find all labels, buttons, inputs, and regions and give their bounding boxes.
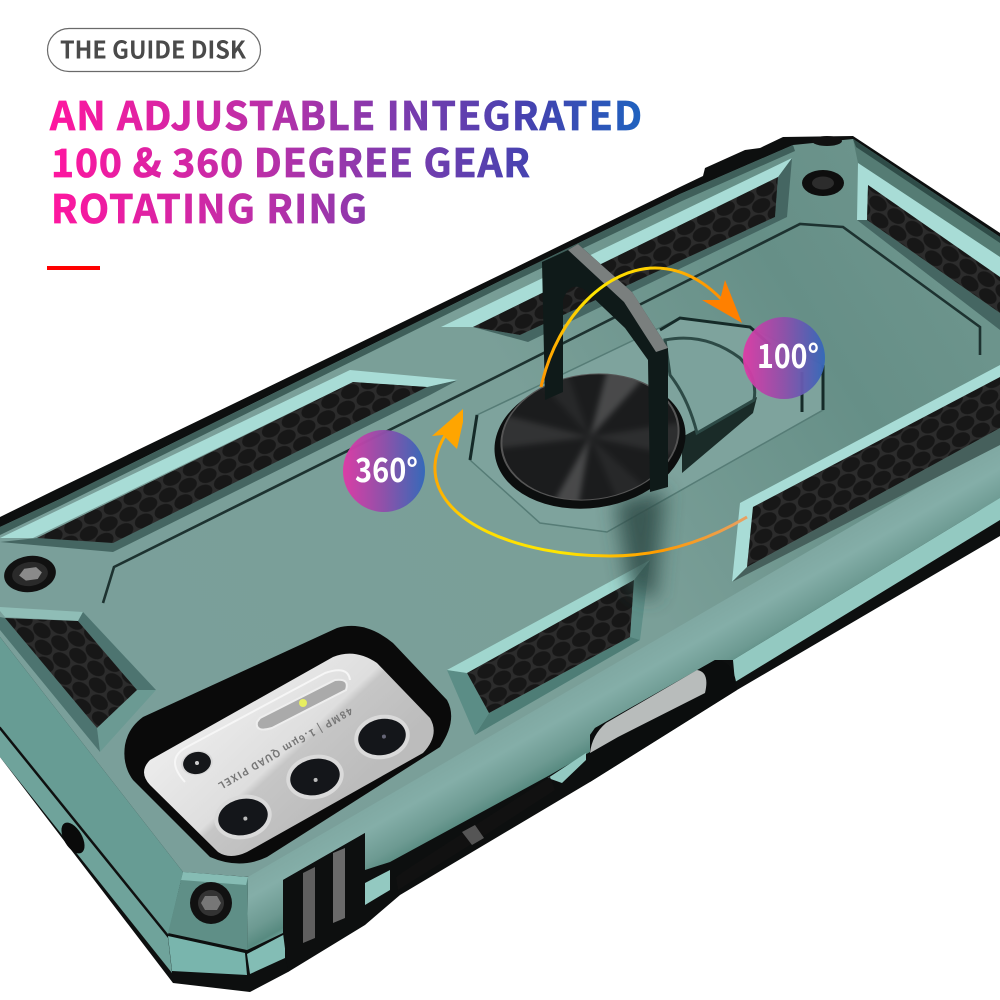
- badge: 360 degrees: [343, 430, 425, 512]
- light band after side button: [733, 498, 1000, 682]
- badge: 100 degrees: 100°: [757, 330, 819, 378]
- lower side buttons: [396, 777, 555, 890]
- inner panel outline: [103, 224, 980, 603]
- ring plate: [470, 318, 823, 532]
- grip strip: lower centre: [447, 560, 650, 735]
- lens panel outline: [175, 670, 350, 782]
- camera lens centre: [282, 749, 348, 805]
- camera lens left: [210, 789, 276, 845]
- camera island: [144, 654, 434, 856]
- folding ring arch: [542, 244, 668, 492]
- corner facets: [168, 872, 248, 950]
- title: AN ADJUSTABLE INTEGRATED: [49, 86, 642, 142]
- light band beside vent: [365, 870, 390, 905]
- camera recess: [124, 626, 451, 864]
- side button recess with silver button: [590, 660, 737, 782]
- ring shadow on case: [615, 490, 665, 600]
- red accent line: [47, 266, 100, 270]
- heading badge: the guide disk: THE GUIDE DISK: [60, 30, 247, 66]
- grip strip: upper left: [0, 370, 458, 552]
- left lower side faces: [0, 637, 183, 935]
- side face: [247, 440, 1000, 950]
- ring grey bevel: [568, 244, 668, 352]
- light band before side button: [548, 753, 586, 783]
- screw: bottom: [190, 882, 232, 924]
- flash pill: [257, 680, 347, 730]
- arrow: 360 degree arc: [432, 409, 747, 556]
- camera lens right: [350, 710, 414, 764]
- grip strip: lower left: [0, 607, 156, 752]
- grip strip: top right: [857, 163, 1000, 330]
- arrow: 100 degree arc: [541, 268, 742, 387]
- disc brushed metal: [502, 374, 678, 500]
- grip strip: lower right: [732, 365, 1000, 582]
- title: ROTATING RING: [51, 179, 367, 235]
- grip strip: top centre: [441, 158, 792, 342]
- top rim dark band: [0, 145, 795, 535]
- title: 100 & 360 DEGREE GEAR: [51, 133, 530, 189]
- title: [49, 86, 642, 235]
- plate edge lines: [470, 318, 823, 460]
- ring base disc: [494, 373, 686, 509]
- camera spec text: 48MP | 1.6μm QUAD PIXEL: [216, 704, 356, 794]
- screw: top right: [802, 170, 844, 196]
- top port: [812, 136, 842, 146]
- vent block with grey stripes: [283, 833, 365, 972]
- screw: left: [2, 553, 58, 595]
- badge: 100 degrees: [743, 317, 825, 399]
- oval socket: [665, 338, 757, 473]
- case back face: [0, 139, 1000, 877]
- headphone port: [57, 819, 89, 857]
- badge: 360 degrees: 360°: [355, 444, 418, 492]
- right rim band: [853, 139, 1000, 257]
- camera lens small: [179, 748, 215, 778]
